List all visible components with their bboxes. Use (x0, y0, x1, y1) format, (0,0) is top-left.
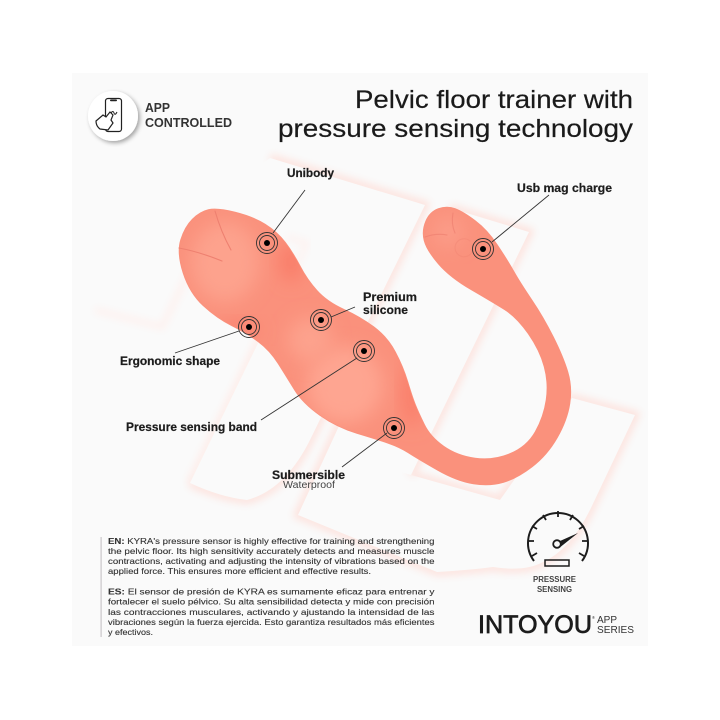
title: pressure sensing technology (278, 115, 634, 143)
description text block: y efectivos. (108, 627, 153, 637)
description text block: contractions, activating and adjusting the intensity of vibrations based on the (108, 556, 435, 566)
head creases (179, 211, 472, 261)
panel: background (72, 73, 648, 646)
label: unibody: Unibody (287, 168, 335, 180)
label: submersible: Submersible (272, 470, 345, 482)
app controlled label: CONTROLLED (145, 116, 232, 130)
product: pelvic floor trainer (179, 208, 570, 484)
logo: intoyou app series: INTOYOU (478, 611, 592, 639)
label: premium silicone: Premium (363, 292, 417, 304)
label: submersible: Waterproof (283, 480, 335, 491)
logo: intoyou app series: APP (597, 614, 617, 626)
target: pressure sensing band (261, 340, 374, 420)
icon: app controlled badge (88, 91, 138, 141)
label: premium silicone: silicone (363, 305, 408, 317)
app controlled label: APP (145, 101, 170, 115)
logo: intoyou app series: SERIES (597, 624, 634, 636)
title: Pelvic floor trainer with (355, 86, 633, 114)
description text block: vibraciones según la fuerza ejercida. Esto garantiza resultados más eficientes (108, 617, 434, 627)
label: pressure sensing: PRESSURE (533, 575, 577, 584)
title (278, 86, 634, 143)
target: usb mag charge (472, 195, 549, 260)
description text block: fortalecer el suelo pélvico. Su alta sensibilidad detecta y mide con precisión (108, 596, 435, 606)
label: pressure sensing: SENSING (537, 585, 572, 594)
target: premium silicone (310, 307, 355, 330)
description text block: las contracciones musculares, activando y ajustando la intensidad de las (108, 607, 434, 617)
background logo shape: left (95, 158, 425, 500)
label: premium silicone (363, 292, 417, 317)
description text block: EN: KYRA's pressure sensor is highly effective for training and strengthening (108, 536, 435, 546)
app controlled label (145, 101, 232, 130)
label: pressure sensing band: Pressure sensing band (126, 422, 257, 434)
label: ergonomic shape: Ergonomic shape (120, 356, 220, 368)
background logo shape: right (298, 208, 635, 572)
logo: intoyou app series: ® (592, 615, 595, 620)
target: unibody (256, 190, 305, 254)
description text block (100, 536, 435, 637)
infographic canvas (86, 90, 643, 637)
description text block: the pelvic floor. Its high sensitivity accurately detects and measures muscle (108, 546, 435, 556)
description text block: applied force. This ensures more efficient and effective results. (108, 566, 371, 576)
description text block: ES: El sensor de presión de KYRA es sumamente eficaz para entrenar y (108, 586, 435, 596)
label: pressure sensing (533, 575, 577, 594)
label: usb mag charge: Usb mag charge (517, 183, 612, 195)
icon: pressure gauge (528, 511, 588, 566)
target: ergonomic shape (175, 316, 260, 353)
target: submersible (342, 418, 404, 467)
label: submersible (272, 470, 345, 491)
